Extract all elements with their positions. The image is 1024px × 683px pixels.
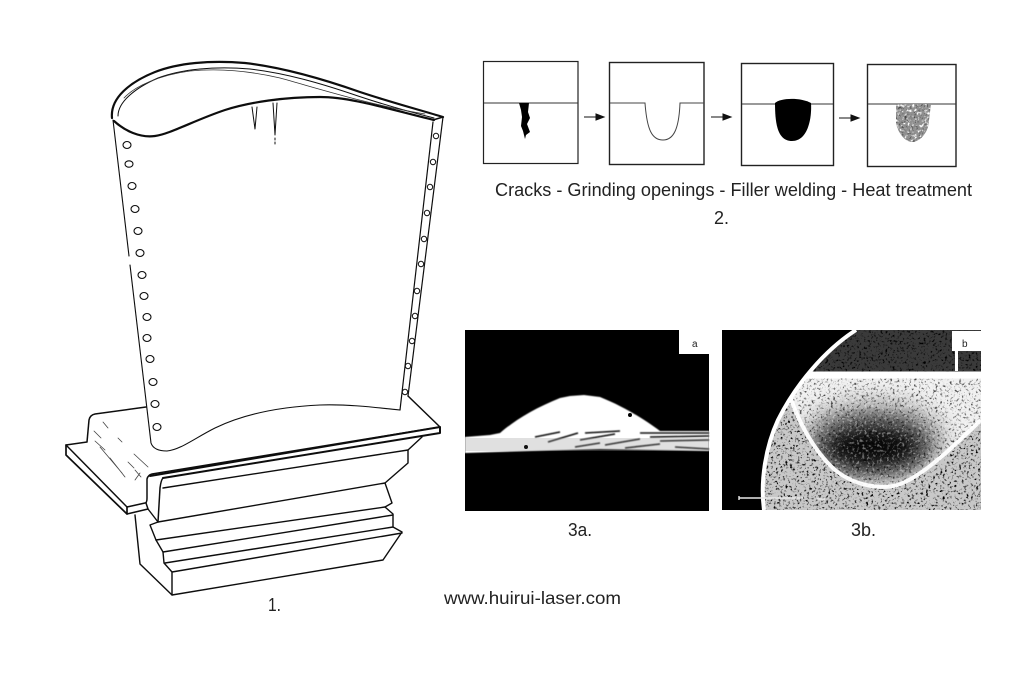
platform <box>66 396 440 522</box>
top white band <box>805 372 981 378</box>
step: filler welding <box>742 64 834 166</box>
label b <box>952 331 981 351</box>
cooling holes right <box>402 133 439 395</box>
label a <box>679 330 709 354</box>
caption 3b: 3b. <box>851 520 876 540</box>
blade tip crack marks <box>252 103 277 146</box>
panel: repair process <box>484 62 972 228</box>
arrow <box>839 115 859 121</box>
caption 2: 2. <box>714 208 729 228</box>
illustration: turbine blade <box>66 62 443 595</box>
arrow <box>584 114 604 120</box>
outer white rim <box>763 330 856 510</box>
cooling holes left <box>123 142 161 430</box>
photo 3a: a <box>692 339 698 350</box>
photo 3b: b <box>962 339 968 350</box>
weld bead <box>465 395 709 453</box>
caption 1: 1. <box>268 595 281 615</box>
arrow <box>711 114 731 120</box>
blade body edges <box>113 117 443 451</box>
melt pool <box>793 378 981 485</box>
step: heat treatment <box>868 64 956 166</box>
upper dark zone <box>812 330 981 372</box>
process caption: Cracks - Grinding openings - Filler welding - Heat treatment <box>495 179 972 200</box>
inclusions <box>628 413 632 417</box>
photo 3b <box>722 330 985 510</box>
shank and root <box>135 437 422 595</box>
scale bar <box>739 496 825 500</box>
fusion boundary <box>790 398 981 489</box>
photo 3a <box>465 330 709 511</box>
platform shading <box>94 422 148 480</box>
step: grinding openings <box>610 62 704 164</box>
substrate band texture <box>535 431 709 449</box>
step: cracks <box>484 62 578 164</box>
caption 3a: 3a. <box>568 520 592 540</box>
blade tip outline <box>112 62 443 136</box>
website url: www.huirui-laser.com <box>443 588 621 608</box>
